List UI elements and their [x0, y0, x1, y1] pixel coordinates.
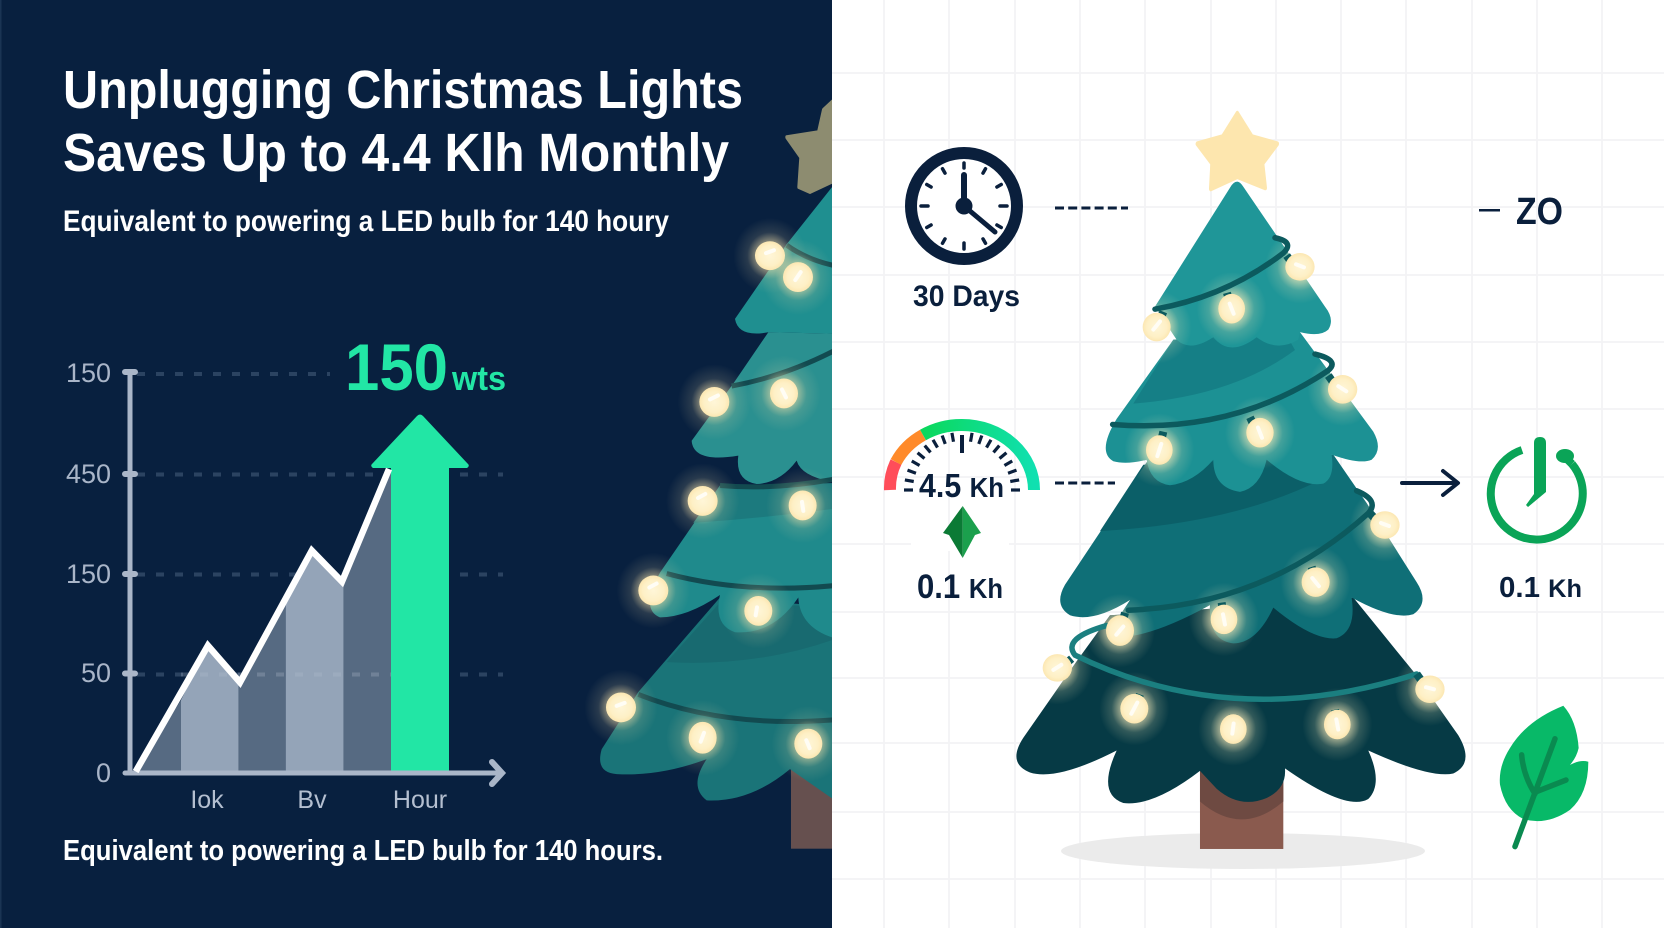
subtitle: Equivalent to powering a LED bulb for 140 houry	[63, 205, 669, 238]
tier 1	[1155, 182, 1331, 347]
label: 30 Days: 30 Days	[913, 280, 1020, 313]
gauge: 4.5 Kh	[890, 425, 1034, 504]
x axis labels: Bv	[297, 786, 327, 814]
panel: left dark background	[0, 0, 832, 928]
gauge arc	[890, 425, 1034, 490]
tier 3	[1060, 455, 1423, 643]
light strings	[1072, 238, 1417, 699]
strings	[638, 245, 840, 722]
illustration: Christmas tree	[1016, 113, 1466, 849]
label: ZO	[1479, 191, 1563, 233]
icon: clock	[911, 153, 1017, 259]
stat: 150 wts: 150	[345, 330, 448, 404]
y axis labels: 150	[66, 559, 111, 589]
bulb sockets	[1067, 256, 1421, 719]
icon: green down arrow	[943, 506, 981, 558]
tier 5	[600, 597, 840, 804]
trunk	[791, 770, 832, 849]
label: 0.1 Kh right: 0.1 Kh	[1499, 572, 1582, 604]
y axis labels: 0	[96, 758, 111, 788]
area bars	[136, 469, 391, 772]
label: ZO: ZO	[1516, 191, 1563, 233]
bulbs	[1043, 253, 1445, 744]
bulb highlights	[1053, 264, 1434, 734]
gauge ticks	[904, 433, 1020, 490]
star behind tree	[787, 97, 837, 192]
tier 2	[735, 187, 832, 334]
ground shadow	[1061, 833, 1425, 869]
chart: wattage rising to 150	[66, 358, 503, 814]
x axis labels: Hour	[393, 786, 447, 814]
label: 0.1 Kh left: 0.1 Kh	[917, 568, 1003, 606]
y axis labels: 50	[81, 658, 111, 688]
star	[1197, 113, 1277, 189]
bulb glow on branches	[1050, 242, 1446, 764]
dashed connector: clock	[1055, 206, 1128, 210]
dashed connector: gauge	[1055, 482, 1115, 484]
tier 2	[1106, 330, 1378, 492]
x axis labels	[190, 786, 447, 814]
title: Saves Up to 4.4 Klh Monthly	[63, 123, 729, 183]
glows	[584, 218, 845, 782]
bulb highlights	[617, 250, 810, 748]
stat: 150 wts: wts	[451, 360, 506, 398]
grid lines	[137, 374, 503, 674]
grid overlay over bars	[181, 672, 391, 676]
icon: leaf	[1500, 706, 1588, 847]
y axis labels: 150	[66, 358, 111, 388]
y axis labels: 450	[66, 459, 111, 489]
illustration: glowing tree cropped at panel edge	[584, 97, 845, 849]
trunk	[1200, 763, 1283, 849]
panel: right background	[832, 0, 1664, 928]
footer text: Equivalent to powering a LED bulb for 140 hours.	[63, 835, 663, 867]
axes	[125, 372, 502, 784]
tier 3	[692, 332, 840, 484]
gauge value: 4.5 Kh	[919, 467, 1004, 504]
bulbs	[606, 241, 822, 759]
tier 4	[1016, 597, 1466, 803]
title	[63, 60, 743, 183]
green arrow	[371, 414, 469, 772]
tier 4	[650, 483, 840, 640]
title: Unplugging Christmas Lights	[63, 60, 743, 120]
trend line	[136, 469, 389, 772]
arrow to power icon	[1402, 471, 1458, 495]
stat: 150 wts	[345, 330, 506, 404]
x axis labels: Iok	[190, 786, 224, 814]
icon: power symbol	[1491, 437, 1583, 540]
y axis labels	[66, 358, 111, 788]
